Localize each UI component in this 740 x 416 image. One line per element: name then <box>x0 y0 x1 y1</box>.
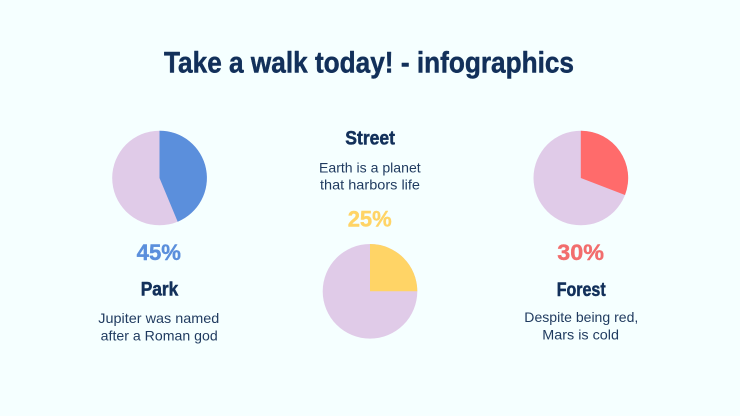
percentage: 25%: 25% <box>348 206 392 232</box>
title: Take a walk today! - infographics <box>164 46 574 80</box>
text: street description: Earth is a planet <box>319 159 421 175</box>
text: street description: that harbors life <box>320 176 420 192</box>
heading: Park: Park <box>141 280 179 300</box>
heading: Street: Street <box>345 128 396 149</box>
panel: forest <box>524 131 638 342</box>
text: park description: Jupiter was named <box>98 310 219 326</box>
text: forest description: Despite being red, <box>524 309 638 325</box>
text: park description: after a Roman god <box>101 328 218 344</box>
percentage: 30%: 30% <box>557 240 604 265</box>
text: forest description: Mars is cold <box>542 326 619 342</box>
panel: park <box>98 131 219 344</box>
text: park description <box>98 310 219 344</box>
panel: street <box>319 128 421 339</box>
text: street description <box>319 159 421 192</box>
pie chart: park 45% <box>112 131 207 225</box>
percentage: 45%: 45% <box>137 240 181 265</box>
pie chart: forest 30% <box>534 131 628 225</box>
text: forest description <box>524 309 638 342</box>
pie chart: street 25% <box>323 244 417 339</box>
heading: Forest: Forest <box>557 280 606 301</box>
